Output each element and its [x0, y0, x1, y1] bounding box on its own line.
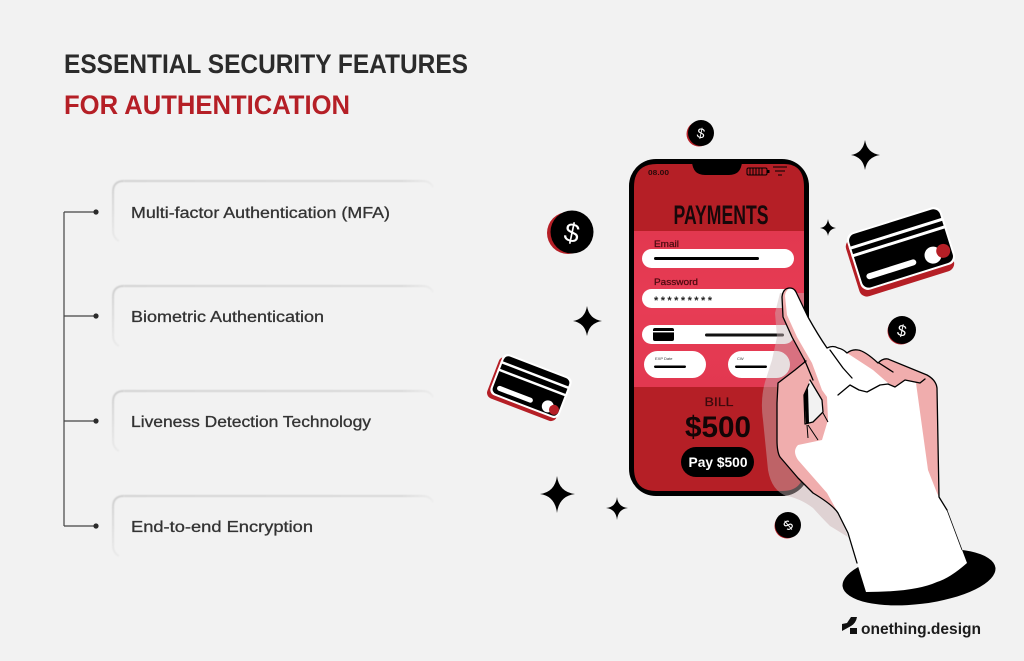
- pay button: Pay $500: [688, 454, 748, 470]
- icon: coin top: [686, 120, 714, 146]
- phone battery: [747, 168, 770, 175]
- card number field: [642, 325, 794, 344]
- phone screen form area: [634, 231, 804, 387]
- gap between finger and thumb: [805, 380, 823, 424]
- hand wrist right line: [947, 510, 962, 550]
- hand shadow over phone: [762, 293, 804, 496]
- icon: coin bottom: $: [780, 516, 796, 534]
- phone notch: [692, 162, 742, 175]
- phone heading: PAYMENTS: [674, 200, 768, 230]
- logo: [842, 617, 981, 638]
- logo mark: [842, 617, 857, 634]
- panel: Liveness Detection Technology: Liveness Detection Technology: [131, 414, 371, 431]
- phone edge seen through gap: [804, 388, 809, 424]
- card: left: [485, 351, 573, 424]
- hand inner finger lines: [807, 413, 828, 440]
- phone screen bill area: [634, 387, 804, 491]
- panel: Liveness Detection Technology: [113, 391, 433, 451]
- icon: coin bottom: [774, 512, 801, 538]
- icon: hole under hand: [839, 541, 999, 613]
- panel: End-to-end Encryption: [113, 496, 433, 556]
- email field: Email: [654, 239, 679, 250]
- card: top right: [842, 205, 959, 299]
- CVV field: [728, 351, 790, 378]
- title: [64, 49, 468, 120]
- title: FOR AUTHENTICATION: [64, 90, 350, 120]
- icon: coin top: $: [696, 124, 707, 142]
- phone signal: [773, 167, 787, 175]
- icon: coin right: [888, 316, 916, 344]
- icon: coin right: $: [896, 322, 908, 341]
- panel: Multi-factor Authentication: [113, 181, 433, 241]
- hand cast shadow on background: [783, 480, 848, 537]
- title: ESSENTIAL SECURITY FEATURES: [64, 49, 468, 79]
- hand: [777, 288, 967, 592]
- icon: sparkles: [540, 140, 880, 520]
- logo: onething.design: [861, 621, 981, 638]
- pay button: [681, 447, 754, 477]
- bill label: BILL: [704, 395, 734, 409]
- email field: [642, 239, 794, 268]
- hand base: [777, 288, 967, 592]
- expiry date field: EXP Date: [655, 356, 673, 361]
- connector tree: [64, 209, 99, 529]
- phone time: 08.00: [648, 168, 669, 177]
- panel: Biometric Authentication: [113, 286, 433, 346]
- password field: [642, 277, 794, 308]
- phone: [629, 159, 809, 496]
- password field: *********: [654, 295, 713, 307]
- password field: Password: [654, 277, 698, 288]
- icon: coin large: $: [561, 217, 582, 249]
- icon: coin large: [547, 210, 594, 254]
- expiry date field: [644, 351, 706, 378]
- panel: Multi-factor Authentication: Multi-factor Authentication (MFA): [131, 205, 390, 222]
- hand pink shade: finger rim and palm: [777, 288, 842, 520]
- CVV field: CW: [737, 356, 744, 361]
- bill amount: $500: [685, 411, 751, 444]
- phone screen top band: [634, 164, 804, 231]
- hand pink shade: knuckles and back: [847, 350, 939, 497]
- panel: Biometric Authentication: Biometric Authentication: [131, 309, 324, 326]
- panel: End-to-end Encryption: End-to-end Encryption: [131, 519, 313, 536]
- hand outline: [777, 288, 947, 563]
